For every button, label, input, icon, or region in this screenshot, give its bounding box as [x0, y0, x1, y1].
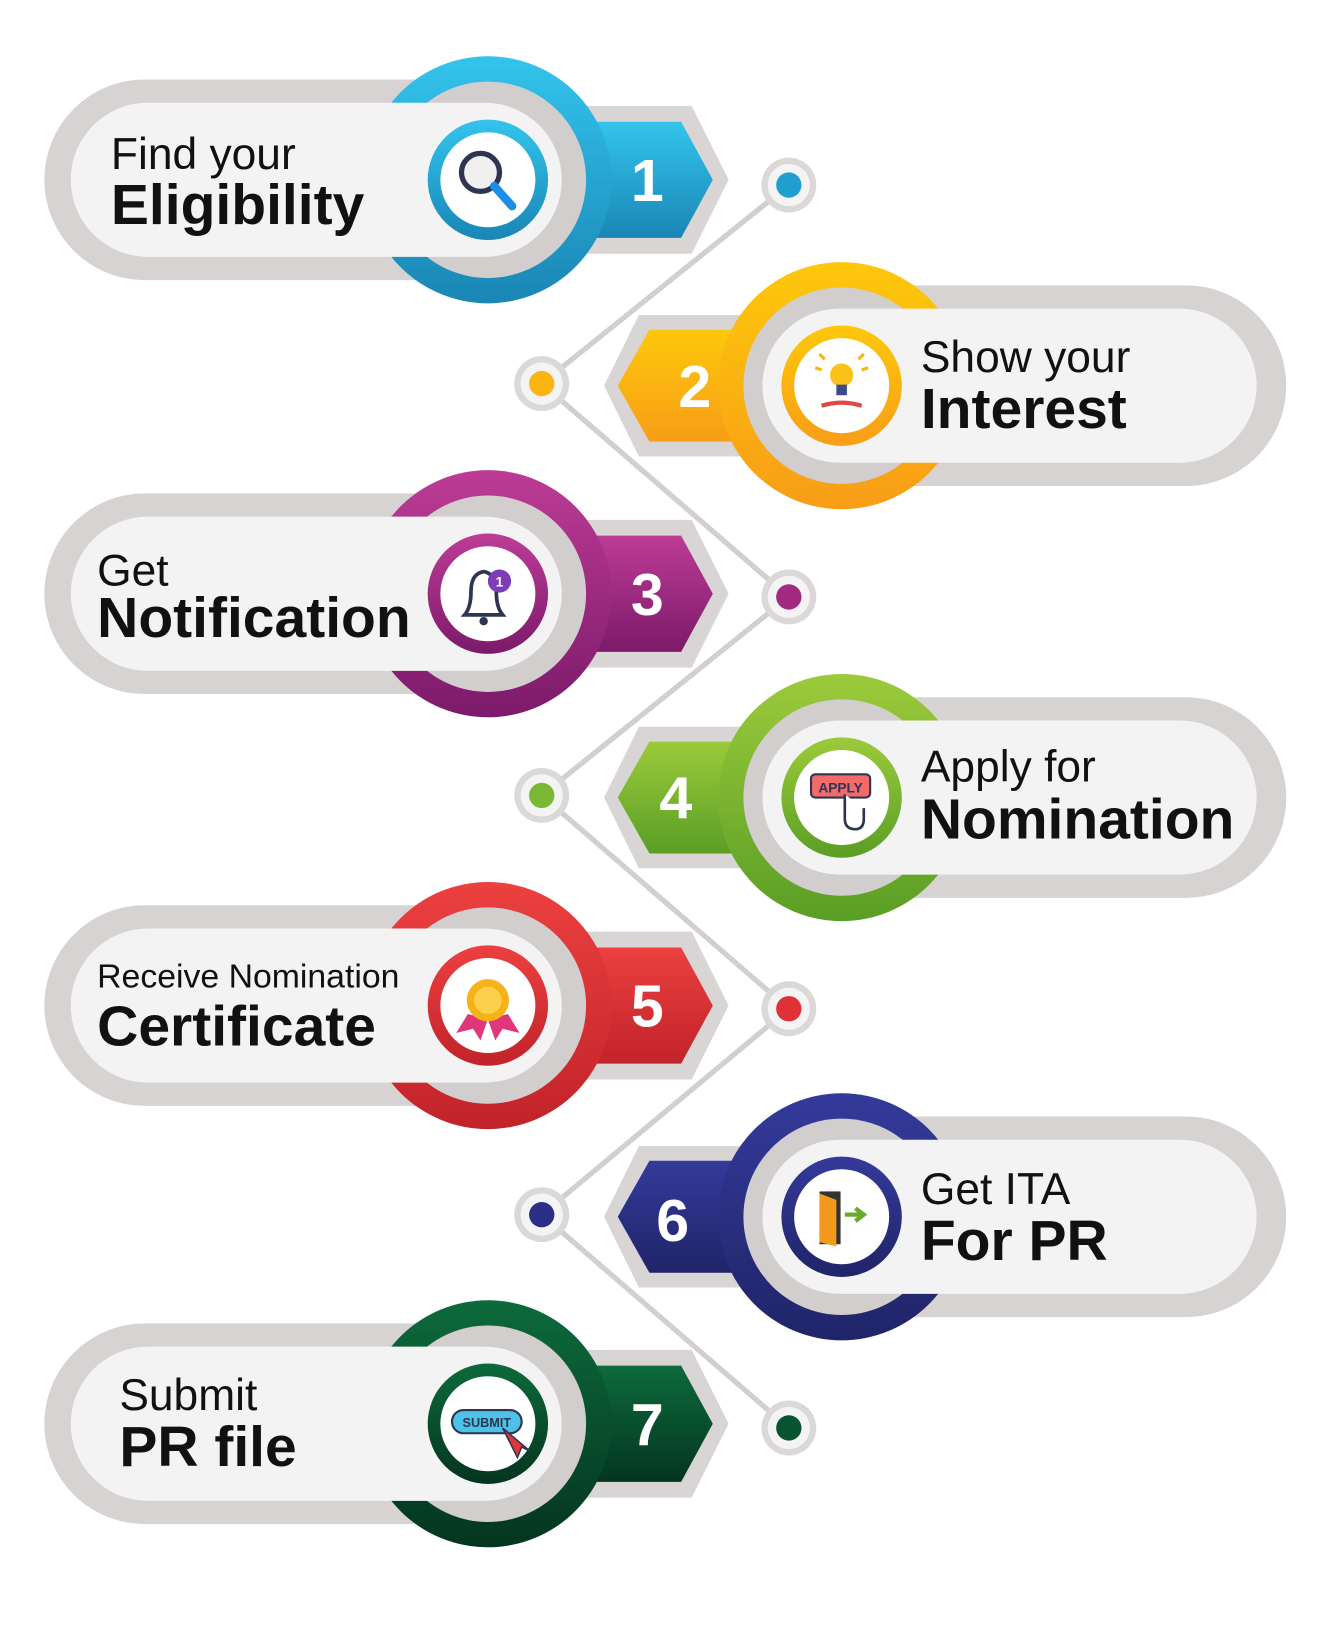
- step 6: Get ITA For PR: For PR: [921, 1209, 1108, 1273]
- step 3: Get Notification: Get: [97, 546, 169, 595]
- step 7: Submit PR file: PR file: [119, 1415, 297, 1479]
- step 4: Apply for Nomination: Apply for: [921, 743, 1096, 792]
- step 7: Submit PR file: 7: [631, 1391, 664, 1458]
- step 7: Submit PR file: Submit: [119, 1371, 257, 1420]
- step 3: Get Notification: 3: [631, 561, 664, 628]
- step 1: Find your Eligibility: Eligibility: [111, 173, 365, 237]
- icon: bell: [465, 569, 511, 625]
- step 5: Receive Nomination Certificate: 5: [631, 973, 664, 1040]
- step 2: Show your Interest: [604, 262, 1286, 509]
- step 4: Apply for Nomination: [604, 674, 1286, 921]
- step 1: Find your Eligibility: 1: [631, 147, 664, 214]
- step 4: Apply for Nomination: Nomination: [921, 788, 1234, 852]
- step 6: Get ITA For PR: Get ITA: [921, 1165, 1071, 1214]
- step 2: Show your Interest: 2: [678, 353, 711, 420]
- step 3: Get Notification: [44, 470, 729, 717]
- icon: apply button with hand: APPLY: [818, 780, 863, 795]
- connector dots: [514, 158, 816, 1455]
- step 6: Get ITA For PR: [604, 1093, 1286, 1340]
- step 2: Show your Interest: Interest: [921, 377, 1127, 441]
- step 6: Get ITA For PR: 6: [656, 1187, 689, 1254]
- icon: submit button: [452, 1410, 530, 1458]
- icon: submit button: SUBMIT: [463, 1416, 511, 1430]
- step 2: Show your Interest: Show your: [921, 333, 1131, 382]
- icon: bell: 1: [496, 574, 504, 589]
- step 5: Receive Nomination Certificate: [44, 882, 729, 1129]
- step 4: Apply for Nomination: 4: [659, 765, 692, 832]
- step 1: Find your Eligibility: Find your: [111, 130, 296, 179]
- icon: magnifier: [461, 153, 512, 206]
- connector lines: [542, 185, 789, 1428]
- step 5: Receive Nomination Certificate: Certificate: [97, 995, 376, 1059]
- icon: apply button with hand: [811, 774, 870, 829]
- icon: medal: [456, 979, 520, 1040]
- step 1: Find your Eligibility: [44, 56, 729, 303]
- step 7: Submit PR file: [44, 1300, 729, 1547]
- step 5: Receive Nomination Certificate: Receive Nomination: [97, 958, 399, 996]
- icon: light bulb with book: [815, 354, 868, 406]
- icon: door exit: [819, 1191, 864, 1246]
- step 3: Get Notification: Notification: [97, 586, 411, 650]
